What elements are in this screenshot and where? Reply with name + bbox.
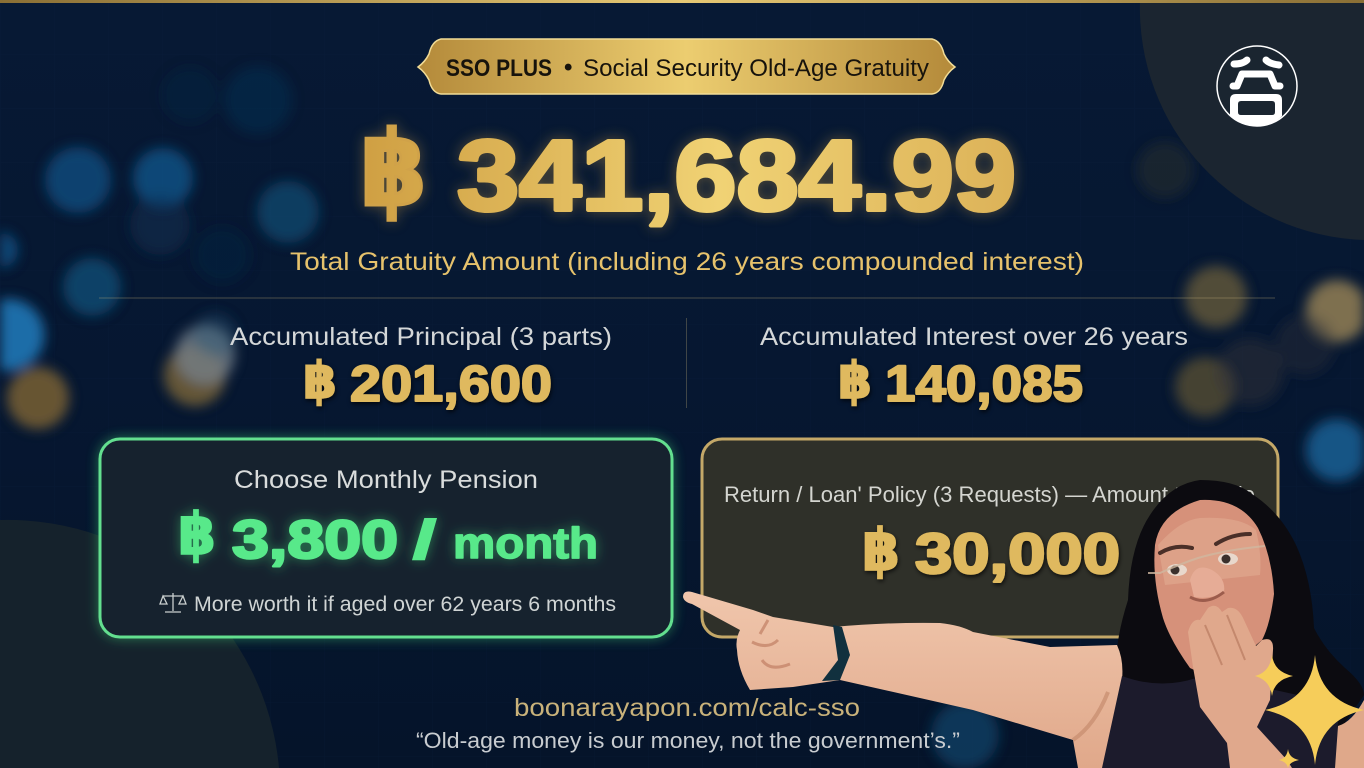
tank top	[1102, 676, 1338, 768]
panel: monthly pension: /	[413, 510, 436, 570]
interest block: ฿	[838, 352, 872, 411]
panel: monthly pension: 3,800	[232, 510, 398, 570]
glasses	[1148, 546, 1265, 573]
right shoulder	[1335, 700, 1364, 768]
person pointing	[683, 480, 1364, 768]
principal block: 201,600	[350, 355, 552, 412]
panel: monthly pension: month	[453, 519, 598, 568]
interest block: 140,085	[885, 355, 1083, 412]
principal block	[230, 323, 612, 412]
panel: monthly pension: ฿	[178, 500, 216, 568]
hand over mouth	[1188, 606, 1292, 768]
panel: monthly pension: Choose Monthly Pension	[234, 466, 538, 494]
total caption: Total Gratuity Amount (including 26 years compounded interest)	[290, 248, 1084, 276]
banner: •	[564, 54, 572, 81]
logo badge	[1217, 46, 1297, 126]
icon: balance scale	[160, 593, 186, 612]
brows and eyes	[1160, 534, 1250, 553]
banner: Social Security Old-Age Gratuity	[583, 55, 929, 82]
panel: return loan policy: 30,000	[915, 522, 1120, 586]
total amount	[360, 108, 1016, 232]
watch band	[822, 625, 850, 681]
footer quote: “Old-age money is our money, not the government’s.”	[416, 728, 960, 753]
total amount: ฿	[360, 108, 427, 230]
hair	[1116, 480, 1364, 730]
nose	[1190, 568, 1224, 598]
face	[1154, 500, 1274, 680]
total amount: 341,684.99	[457, 120, 1016, 232]
panel: return loan policy: ฿	[862, 516, 900, 584]
upper arm and hand	[683, 592, 1122, 768]
interest block	[760, 323, 1188, 412]
banner: SSO PLUS	[446, 55, 552, 82]
principal block: ฿	[303, 352, 337, 411]
panel: return loan policy	[702, 439, 1278, 637]
top gold line	[0, 0, 1364, 3]
panel: monthly pension	[100, 439, 672, 637]
footer url: boonarayapon.com/calc-sso	[514, 694, 860, 722]
banner	[418, 39, 955, 94]
panel: return loan policy: Return / Loan' Policy (3 Requests) — Amount to Settle	[724, 482, 1255, 507]
interest block: Accumulated Interest over 26 years	[760, 323, 1188, 351]
panel: monthly pension: More worth it if aged over 62 years 6 months	[194, 593, 616, 616]
sparkles	[1255, 655, 1364, 768]
principal block: Accumulated Principal (3 parts)	[230, 323, 612, 351]
